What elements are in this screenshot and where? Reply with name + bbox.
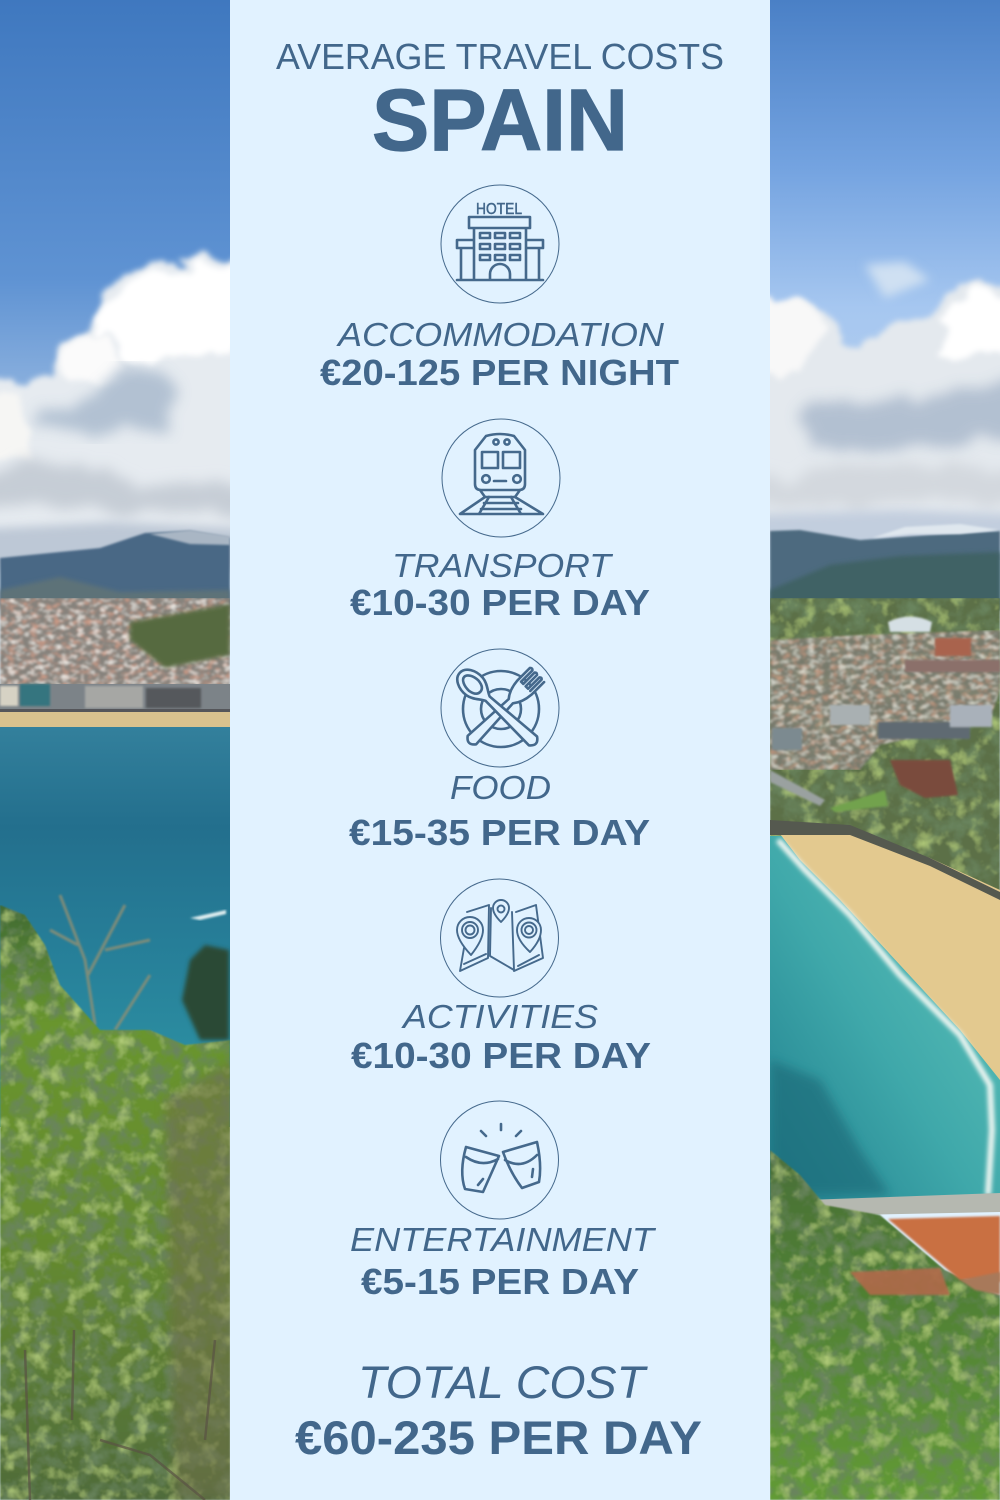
clouds left	[0, 247, 230, 570]
title	[276, 36, 724, 169]
total cost: €60-235 PER DAY	[295, 1411, 702, 1464]
food cost: FOOD	[450, 769, 551, 806]
trees lower right	[770, 1150, 1000, 1500]
bare branches	[50, 895, 150, 1030]
hillside town right	[770, 598, 1000, 905]
beach right	[780, 830, 1000, 1080]
food cost: €15-35 PER DAY	[349, 812, 650, 853]
transport cost: €10-30 PER DAY	[350, 582, 650, 623]
photo: left strip of San Sebastian bay	[0, 0, 230, 1500]
entertainment cost: €5-15 PER DAY	[361, 1261, 639, 1302]
trees left	[0, 905, 230, 1500]
icon: map with pins	[440, 879, 558, 997]
mountains left	[0, 531, 230, 605]
photo: right strip of San Sebastian beach	[770, 0, 1000, 1500]
transport cost	[350, 547, 650, 623]
entertainment cost	[350, 1221, 657, 1302]
sea wall	[770, 820, 1000, 900]
surf line	[778, 840, 992, 1195]
activities cost: €10-30 PER DAY	[351, 1035, 651, 1076]
title: SPAIN	[372, 72, 628, 169]
transport cost: TRANSPORT	[392, 547, 614, 584]
city left	[0, 598, 230, 684]
total cost	[295, 1357, 702, 1464]
sea right	[770, 836, 1000, 1200]
central panel	[230, 0, 770, 1500]
icon: hotel	[441, 185, 559, 303]
mountains right	[770, 530, 1000, 610]
icon: clinking glasses	[440, 1101, 558, 1219]
food cost	[349, 769, 650, 853]
accommodation cost: €20-125 PER NIGHT	[320, 352, 679, 393]
entertainment cost: ENTERTAINMENT	[350, 1221, 657, 1258]
clouds right	[770, 258, 1000, 540]
icon: hotel: HOTEL	[476, 201, 522, 218]
icon: plate, spoon and fork	[441, 649, 559, 767]
beach left	[0, 712, 230, 727]
accommodation cost: ACCOMMODATION	[336, 316, 664, 353]
activities cost: ACTIVITIES	[401, 998, 598, 1035]
icon: train	[442, 419, 560, 537]
accommodation cost	[320, 316, 679, 393]
sea left	[0, 727, 230, 1127]
title: AVERAGE TRAVEL COSTS	[276, 36, 724, 77]
promenade	[819, 1193, 1000, 1214]
activities cost	[351, 998, 651, 1076]
total cost: TOTAL COST	[358, 1357, 649, 1408]
tennis courts	[888, 1216, 1000, 1282]
